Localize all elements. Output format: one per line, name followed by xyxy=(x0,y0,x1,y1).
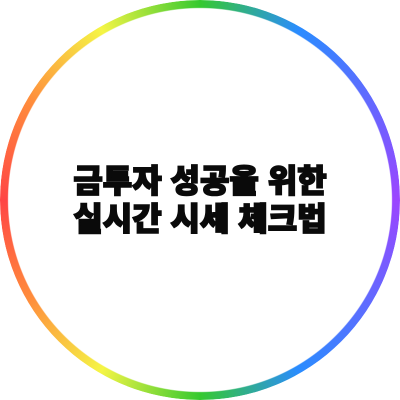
title line 1: 금투자 성공을 위한 xyxy=(73,163,327,199)
title xyxy=(73,163,327,237)
title line 2: 실시간 시세 체크법 xyxy=(73,201,327,237)
